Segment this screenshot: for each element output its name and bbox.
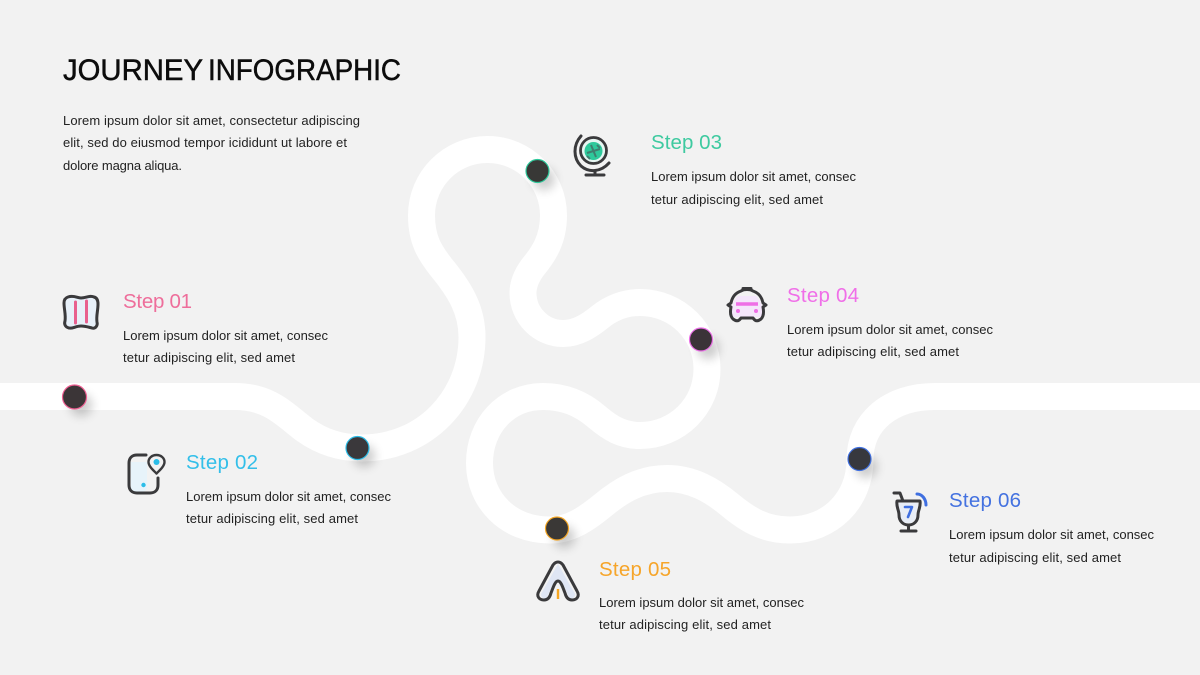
step 05 text [599, 558, 804, 632]
step 02 icon: phone with pin [129, 455, 164, 493]
intro text: Lorem ipsum dolor sit amet, consectetur adipiscing [63, 113, 360, 128]
step 03 text [651, 131, 856, 207]
step 02 marker [346, 436, 375, 467]
step 02 text [186, 451, 392, 526]
intro text: elit, sed do eiusmod tempor icididunt ut labore et [63, 135, 347, 150]
step 04 marker [690, 328, 719, 359]
step 04 icon: taxi [728, 288, 766, 321]
step 01 text: tetur adipiscing elit, sed amet [123, 350, 295, 365]
step 04 text [787, 284, 994, 359]
step 03 text: tetur adipiscing elit, sed amet [651, 192, 823, 207]
step 04 text: Lorem ipsum dolor sit amet, consec [787, 322, 994, 337]
step 05 icon: road triangle [538, 562, 578, 600]
step 05 text: tetur adipiscing elit, sed amet [599, 617, 771, 632]
winding road path [0, 150, 1200, 530]
step 01 icon: map [64, 296, 98, 328]
step 02 text: tetur adipiscing elit, sed amet [186, 511, 358, 526]
step 06 text: Step 06 [949, 489, 1021, 512]
step 01 text: Lorem ipsum dolor sit amet, consec [123, 328, 328, 343]
step 06 icon: drink [894, 493, 926, 531]
step 01 text: Step 01 [123, 290, 192, 313]
title: JOURNEY [63, 54, 203, 87]
step 06 marker [848, 448, 877, 478]
step 03 marker [526, 160, 555, 190]
step 03 icon: globe [575, 136, 609, 175]
step 06 text: tetur adipiscing elit, sed amet [949, 550, 1121, 565]
step 04 text: tetur adipiscing elit, sed amet [787, 344, 959, 359]
intro text: dolore magna aliqua. [63, 158, 182, 173]
step 06 text: Lorem ipsum dolor sit amet, consec [949, 527, 1154, 542]
step 03 text: Step 03 [651, 131, 722, 154]
step 01 marker [62, 385, 92, 416]
intro text [63, 113, 360, 173]
step 03 text: Lorem ipsum dolor sit amet, consec [651, 169, 856, 184]
step 05 text: Lorem ipsum dolor sit amet, consec [599, 595, 804, 610]
step 05 marker [546, 517, 575, 548]
step 02 text: Step 02 [186, 451, 258, 474]
step 06 text [949, 489, 1154, 565]
step 05 text: Step 05 [599, 558, 671, 581]
step 01 text [123, 290, 328, 365]
step 02 text: Lorem ipsum dolor sit amet, consec [186, 489, 392, 504]
title [63, 54, 401, 87]
title: INFOGRAPHIC [208, 54, 401, 87]
step 04 text: Step 04 [787, 284, 859, 307]
